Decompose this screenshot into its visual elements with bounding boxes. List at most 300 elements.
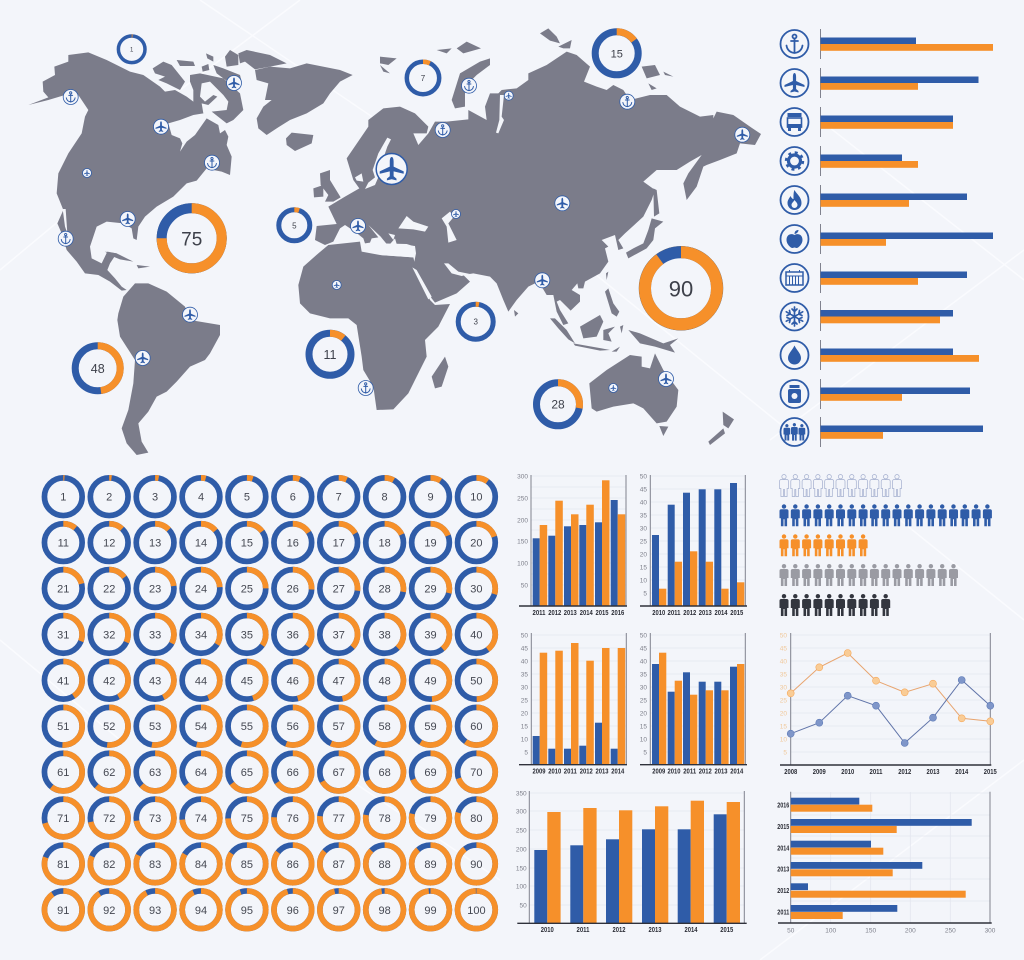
- y axis labels: 200: [517, 518, 528, 524]
- donut 11: [309, 333, 351, 375]
- y axis labels: 100: [517, 560, 528, 568]
- icon: plane marker: [154, 119, 168, 134]
- donut 60: [458, 707, 495, 745]
- donut 74: [182, 799, 220, 837]
- donut 71: 71: [57, 813, 69, 825]
- donut 37: [320, 616, 358, 653]
- donut 73: [136, 799, 174, 837]
- donut 34: [182, 616, 220, 653]
- y axis labels: [780, 632, 787, 756]
- donut 96: 96: [287, 905, 299, 917]
- donut 8: 8: [382, 492, 388, 504]
- donut 99: [412, 891, 449, 929]
- x axis labels: 2016: [611, 608, 624, 617]
- bars: [534, 801, 740, 923]
- y axis labels: 30: [521, 684, 528, 692]
- donut 1: 1: [60, 492, 66, 504]
- icon: large plane marker: [376, 154, 407, 184]
- icon: small marker: [609, 384, 618, 392]
- donut 13: 13: [149, 538, 161, 550]
- donut 56: [274, 707, 312, 745]
- donut 4: [182, 478, 220, 516]
- x axis labels: 2015: [730, 608, 743, 617]
- y axis labels: 15: [640, 564, 647, 572]
- donut 43: 43: [149, 675, 161, 687]
- great britain and ireland: [313, 170, 341, 202]
- x axis labels: 2009: [532, 766, 546, 776]
- donut 94: [182, 891, 220, 929]
- donut 33: [136, 616, 174, 653]
- y axis labels: [640, 632, 647, 756]
- donut 98: [366, 891, 403, 929]
- australia: [589, 353, 678, 436]
- bars: [533, 480, 625, 606]
- donut 10: [458, 478, 495, 516]
- y axis labels: 250: [516, 828, 527, 834]
- y axis labels: 10: [640, 736, 647, 744]
- sri lanka and madagascar: [432, 310, 518, 388]
- x axis labels: 2009: [652, 766, 665, 776]
- row: blue people, 19: [780, 504, 992, 526]
- y axis labels: 15: [640, 724, 647, 730]
- donut 67: [320, 753, 358, 791]
- x axis labels: 300: [985, 928, 996, 934]
- donut 28: [366, 570, 403, 607]
- y axis labels: 35: [640, 512, 647, 520]
- map donuts: [75, 32, 723, 426]
- donut 62: 62: [103, 767, 115, 779]
- icon: anchor marker: [620, 94, 635, 109]
- bars: [652, 653, 744, 765]
- x axis labels: 2010: [841, 767, 854, 776]
- row: apple: [780, 225, 993, 253]
- donut 47: 47: [333, 675, 345, 687]
- y axis labels: 45: [780, 646, 787, 652]
- donut 27: 27: [333, 584, 345, 596]
- donut 72: [90, 799, 128, 837]
- x axis labels: 2011: [683, 766, 696, 776]
- donut 1: 1: [130, 47, 134, 53]
- y axis labels: 5: [524, 750, 528, 756]
- donut 26: 26: [287, 584, 299, 596]
- donut 11: 11: [58, 538, 69, 550]
- donut 66: 66: [287, 767, 299, 779]
- donut 26: [274, 570, 312, 607]
- donut 24: [182, 570, 220, 607]
- y axis labels: 20: [780, 710, 787, 718]
- japan and sakhalin: [626, 188, 663, 258]
- x axis labels: 200: [905, 928, 916, 934]
- donut 25: 25: [241, 584, 253, 596]
- donut 39: [412, 616, 449, 653]
- donut 79: [412, 799, 449, 837]
- donut 95: [228, 891, 266, 929]
- y axis labels: 30: [780, 684, 787, 692]
- y axis labels: 300: [516, 808, 527, 816]
- donut 25: [228, 570, 266, 607]
- donut 40: 40: [470, 629, 483, 641]
- y axis labels: 10: [521, 736, 528, 744]
- donut 81: 81: [57, 859, 69, 871]
- russian arctic islands: [380, 28, 673, 126]
- x axis labels: 2010: [548, 766, 561, 776]
- x axis labels: 2011: [564, 766, 577, 776]
- donut 37: 37: [333, 629, 345, 641]
- donut 29: [412, 570, 449, 607]
- icon: plane marker: [182, 307, 198, 322]
- donut 1: [118, 36, 145, 63]
- y axis labels: 35: [521, 672, 528, 678]
- row: drop: [780, 341, 979, 369]
- donut 87: 87: [333, 859, 345, 871]
- donut 58: 58: [378, 721, 391, 733]
- donut 74: 74: [195, 813, 207, 825]
- y axis labels: 15: [780, 724, 787, 730]
- donut 2: [90, 478, 128, 516]
- donut 80: [458, 799, 495, 837]
- donut 5: 5: [292, 221, 297, 230]
- donut 78: [366, 799, 403, 837]
- y axis labels: 50: [519, 902, 527, 910]
- donut 82: [90, 845, 128, 883]
- y axis labels: 150: [517, 538, 528, 546]
- donut 95: 95: [241, 905, 253, 917]
- bar chart: 2009 to 2014 orange dominant: [519, 632, 627, 776]
- x axis labels: 2011: [668, 608, 680, 617]
- donut 36: 36: [287, 629, 299, 641]
- row: people: [780, 418, 983, 446]
- donut 70: [458, 753, 495, 791]
- donut 14: 14: [195, 538, 207, 550]
- donut 76: 76: [287, 813, 299, 825]
- donut 44: 44: [195, 675, 207, 687]
- donut 87: [320, 845, 358, 883]
- donut 64: [182, 753, 220, 791]
- donut 6: [274, 478, 312, 516]
- y axis labels: [640, 474, 647, 598]
- icon: small marker: [452, 210, 460, 218]
- y axis year labels: 2013: [777, 865, 789, 874]
- donut 46: [274, 661, 312, 699]
- icon: small marker: [332, 280, 341, 290]
- donut 83: 83: [149, 859, 161, 871]
- donut 69: 69: [424, 767, 437, 779]
- donut 31: 31: [57, 629, 69, 641]
- donut 11: 11: [324, 348, 337, 362]
- icon: anchor marker: [58, 231, 73, 246]
- donut 64: 64: [195, 767, 207, 779]
- donut 45: 45: [241, 675, 253, 687]
- y axis labels: 25: [521, 698, 528, 704]
- world map: [28, 28, 761, 455]
- donut 72: 72: [103, 813, 115, 825]
- donut 7: [407, 62, 439, 94]
- y axis year labels: 2011: [777, 908, 789, 917]
- bar chart: 2009 to 2014 balanced: [640, 632, 747, 776]
- donut 39: 39: [424, 629, 437, 641]
- row: dark people, 10: [780, 594, 890, 616]
- donut 53: 53: [149, 721, 161, 733]
- map markers: [58, 76, 750, 396]
- donut 75: 75: [241, 813, 253, 825]
- panel: donut grid 1 to 100: [44, 478, 495, 929]
- y axis year labels: 2014: [777, 844, 790, 852]
- donut 97: [320, 891, 358, 929]
- iceland: [286, 133, 313, 151]
- donut 84: [182, 845, 220, 883]
- donut 5: 5: [244, 492, 250, 504]
- donut 80: 80: [470, 813, 483, 825]
- y axis labels: 50: [640, 474, 647, 480]
- donut 30: [458, 570, 495, 607]
- x axis labels: 2014: [955, 767, 969, 776]
- donut 16: [274, 524, 312, 561]
- donut 58: [366, 707, 403, 745]
- y axis labels: 350: [516, 790, 527, 798]
- y axis labels: 15: [521, 724, 528, 730]
- x axis labels: 2013: [564, 608, 577, 617]
- x axis labels: 2013: [714, 766, 728, 776]
- donut 88: 88: [378, 859, 391, 871]
- donut 48: [75, 346, 120, 391]
- new guinea: [628, 330, 678, 353]
- y axis labels: 20: [640, 710, 647, 718]
- y axis labels: 150: [516, 866, 527, 872]
- donut 67: 67: [333, 767, 345, 779]
- donut 49: 49: [424, 675, 437, 687]
- y axis labels: 45: [640, 646, 647, 652]
- donut 84: 84: [195, 859, 207, 871]
- donut 35: [228, 616, 266, 653]
- donut 18: [366, 524, 403, 561]
- donut 100: 100: [467, 905, 486, 917]
- donut 7: [320, 478, 358, 516]
- donut 49: [412, 661, 449, 699]
- donut 20: 20: [470, 538, 483, 550]
- y axis labels: 25: [640, 538, 647, 546]
- donut 24: 24: [195, 584, 207, 596]
- donut 86: [274, 845, 312, 883]
- x axis labels: 2010: [541, 925, 554, 934]
- bar chart: 2011 to 2016: [517, 474, 627, 617]
- x axis labels: [652, 766, 744, 776]
- donut 23: [136, 570, 174, 607]
- donut 50: [458, 661, 495, 699]
- donut 7: 7: [421, 74, 426, 83]
- donut 90: [458, 845, 495, 883]
- donut 28: [536, 383, 580, 426]
- icon: plane marker: [658, 372, 674, 386]
- donut 50: 50: [470, 675, 483, 687]
- icon: anchor marker: [462, 78, 476, 93]
- donut 90: [639, 246, 723, 330]
- row: anchor: [780, 30, 993, 58]
- donut 21: 21: [57, 584, 69, 596]
- donut 4: 4: [198, 492, 204, 504]
- donut 5: [228, 478, 266, 516]
- x axis labels: 2014: [684, 925, 698, 934]
- donut 89: [412, 845, 449, 883]
- y axis labels: 20: [521, 710, 528, 718]
- x axis labels: 2013: [699, 608, 712, 617]
- x axis labels: 2010: [652, 608, 665, 617]
- donut 27: [320, 570, 358, 607]
- donut 13: [136, 524, 174, 561]
- donut 23: 23: [149, 584, 161, 596]
- row: truck: [780, 108, 953, 136]
- donut 46: 46: [287, 675, 299, 687]
- donut 85: [228, 845, 266, 883]
- x axis labels: [532, 766, 625, 776]
- donut 17: 17: [333, 538, 345, 550]
- y axis labels: 40: [521, 658, 528, 666]
- y axis year labels: 2016: [777, 801, 789, 810]
- donut 75: [157, 204, 226, 273]
- donut 44: [182, 661, 220, 699]
- donut 54: 54: [195, 721, 207, 733]
- icon: plane marker: [735, 127, 750, 142]
- y axis year labels: [777, 801, 790, 917]
- donut 59: [412, 707, 449, 745]
- donut 12: 12: [103, 538, 115, 550]
- donut 33: 33: [149, 629, 161, 641]
- south america: [117, 283, 220, 455]
- x axis labels: 2013: [648, 925, 662, 934]
- donut 19: 19: [424, 538, 437, 550]
- africa: [298, 242, 450, 410]
- y axis labels: 50: [780, 632, 787, 640]
- donut 92: [90, 891, 128, 929]
- eurasia: [315, 52, 761, 325]
- donut 97: 97: [333, 905, 345, 917]
- donut 15: 15: [241, 538, 253, 550]
- southeast asia islands: [550, 272, 623, 352]
- people pictogram: [780, 474, 992, 616]
- donut 70: 70: [470, 767, 483, 779]
- donut 41: [44, 661, 82, 699]
- x axis labels: 2010: [668, 766, 680, 776]
- x axis labels: 2015: [720, 925, 733, 934]
- x axis labels: [541, 925, 733, 934]
- y axis labels: [517, 474, 528, 590]
- donut 76: [274, 799, 312, 837]
- donut 48: 48: [378, 675, 391, 687]
- donut 61: [44, 753, 82, 791]
- y axis year labels: 2012: [777, 886, 789, 895]
- donut 6: 6: [290, 492, 296, 504]
- donut 73: 73: [149, 813, 161, 825]
- x axis labels: 2012: [683, 608, 696, 617]
- donut 94: 94: [195, 905, 207, 917]
- donut 90: 90: [470, 859, 483, 871]
- donut 22: [90, 570, 128, 607]
- donut 12: [90, 524, 128, 561]
- y axis labels: [521, 632, 528, 756]
- donut 51: 51: [57, 721, 69, 733]
- new zealand: [708, 412, 734, 445]
- x axis labels: 2015: [596, 608, 608, 617]
- donut 3: 3: [473, 318, 478, 327]
- donut 65: [228, 753, 266, 791]
- x axis labels: 250: [945, 928, 956, 934]
- panel: icon bar chart: [780, 29, 993, 447]
- donut 52: [90, 707, 128, 745]
- y axis labels: 40: [640, 500, 647, 506]
- donut 59: 59: [424, 721, 437, 733]
- x axis labels: 2009: [813, 767, 826, 776]
- bars: [791, 798, 972, 919]
- donut 77: [320, 799, 358, 837]
- y axis labels: 100: [516, 884, 527, 890]
- donut 75: [228, 799, 266, 837]
- donut 2: 2: [106, 492, 112, 504]
- donut 38: [366, 616, 403, 653]
- row: orange people, 8: [780, 534, 868, 556]
- donut 20: [458, 524, 495, 561]
- donut 48: [366, 661, 403, 699]
- x axis labels: 2011: [870, 767, 882, 776]
- arctic islands: [153, 50, 287, 123]
- x axis labels: 2012: [548, 608, 561, 617]
- donut 47: [320, 661, 358, 699]
- donut 3: [136, 478, 174, 516]
- donut 65: 65: [241, 767, 253, 779]
- inland seas: [63, 95, 504, 299]
- donut 18: 18: [378, 538, 391, 550]
- donut 10: 10: [470, 492, 483, 504]
- donut 68: 68: [378, 767, 391, 779]
- donut 52: 52: [103, 721, 115, 733]
- row: jar: [780, 380, 970, 408]
- x axis labels: 2011: [576, 925, 590, 934]
- donut 56: 56: [287, 721, 299, 733]
- y axis labels: 20: [640, 552, 647, 558]
- y axis labels: 30: [640, 526, 647, 532]
- donut 83: [136, 845, 174, 883]
- donut 57: 57: [333, 721, 345, 733]
- greenland: [255, 63, 353, 135]
- donut 88: [366, 845, 403, 883]
- icon: plane marker: [535, 273, 550, 288]
- x axis labels: 2011: [532, 608, 546, 617]
- icon: small marker: [504, 91, 513, 100]
- donut 42: 42: [103, 675, 115, 687]
- y axis labels: 40: [780, 658, 787, 666]
- donut 32: [90, 616, 128, 653]
- x axis labels: 2012: [699, 766, 712, 776]
- donut 93: 93: [149, 905, 161, 917]
- y axis labels: 35: [640, 672, 647, 678]
- donut 8: [366, 478, 403, 516]
- row: gear: [780, 147, 918, 175]
- y axis labels: 250: [517, 496, 528, 502]
- donut 9: 9: [427, 492, 434, 504]
- donut 78: 78: [378, 813, 391, 825]
- y axis labels: 5: [643, 590, 647, 598]
- donut 3: 3: [152, 492, 158, 504]
- donut 34: 34: [195, 629, 207, 641]
- y axis labels: 5: [643, 750, 647, 756]
- donut 15: 15: [611, 48, 623, 60]
- donut 89: 89: [424, 859, 437, 871]
- donut 15: [595, 32, 638, 75]
- y axis labels: 30: [640, 684, 647, 692]
- axis ticks: [820, 29, 822, 447]
- donut 98: 98: [378, 905, 391, 917]
- bar chart: 2010 to 2015 blue dominant: [640, 474, 747, 617]
- donut 91: 91: [57, 905, 69, 917]
- donut 51: [44, 707, 82, 745]
